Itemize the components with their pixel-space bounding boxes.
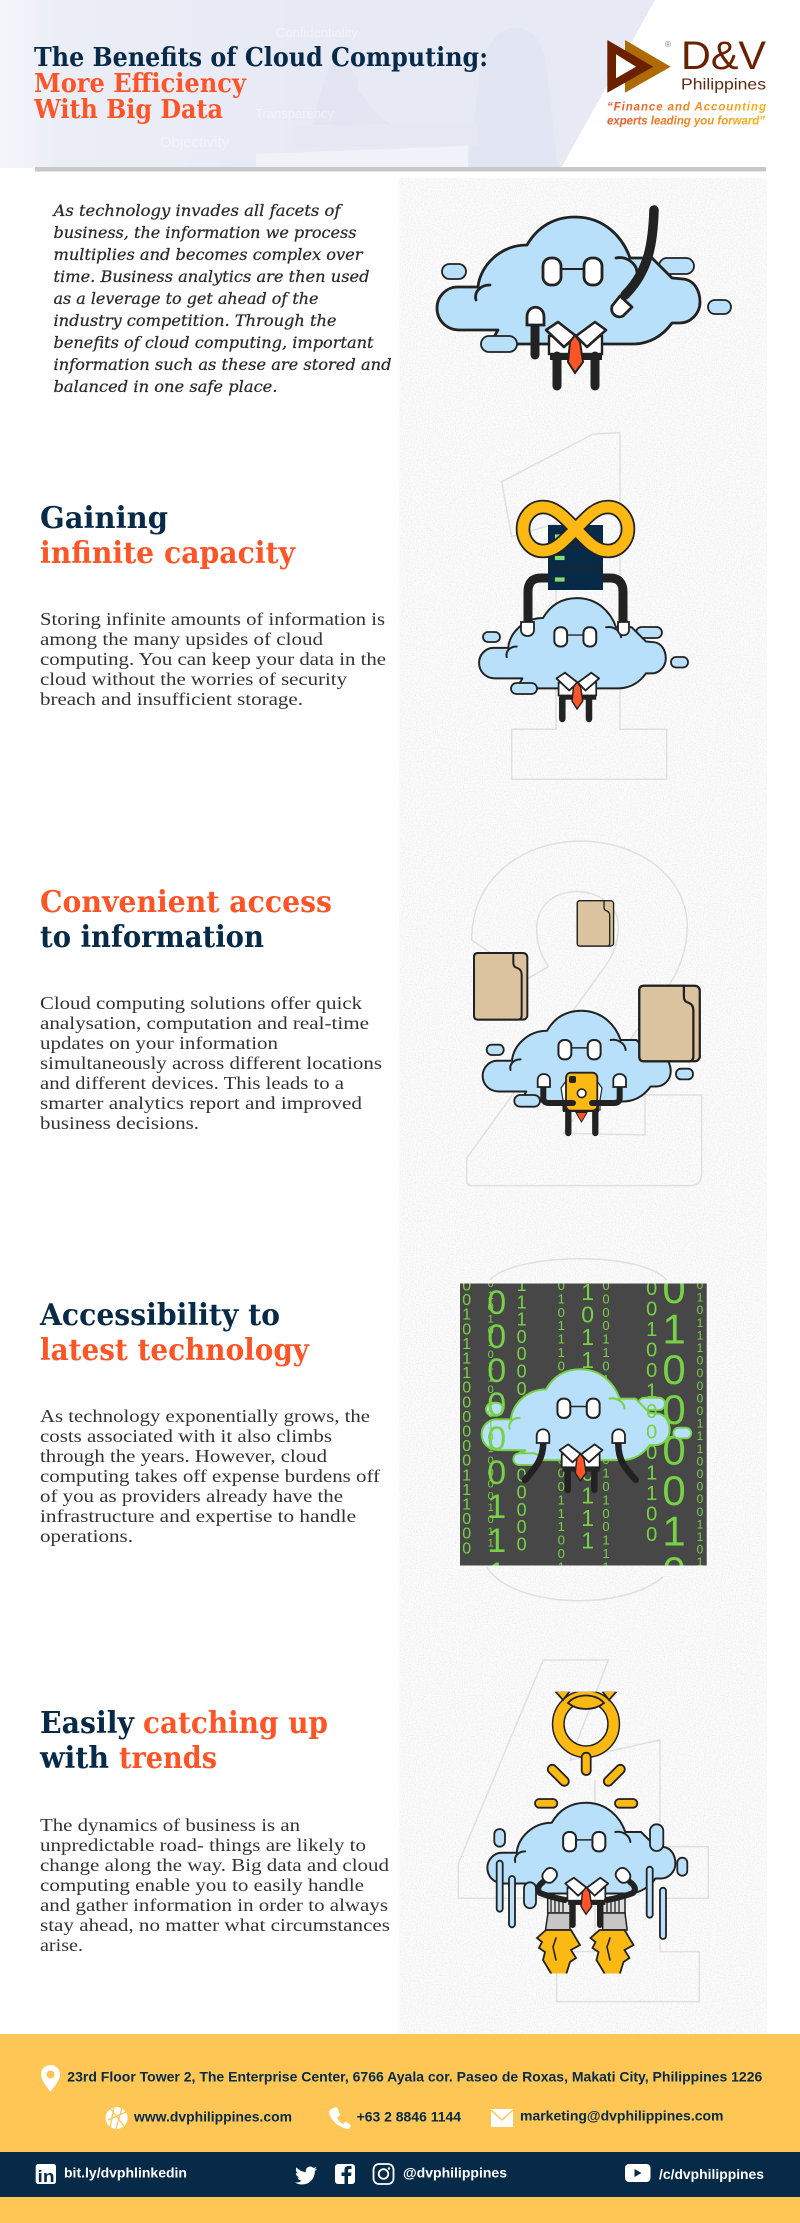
logo: D&V Philippines: “Finance and Accounting (607, 102, 766, 114)
icon: LinkedIn (36, 2164, 56, 2186)
section 4 heading: Easily (40, 1706, 135, 1741)
section 2 body text (40, 993, 382, 1133)
illustration: cloud holding server with infinity sign (479, 507, 688, 719)
intro paragraph: business, the information we process (54, 224, 357, 242)
logo: D&V Philippines: Philippines (681, 76, 766, 94)
illustration: cloud over falling binary code: 0000110101100010100111 (598, 1278, 614, 1573)
section 3 body text: costs associated with it also climbs (40, 1426, 332, 1446)
section 2 body text: smarter analytics report and improved (40, 1093, 362, 1113)
intro paragraph: time. Business analytics are then used (54, 268, 370, 286)
logo: D&V Philippines: ® (665, 40, 671, 49)
title: The Benefits of Cloud Computing: (34, 43, 488, 73)
illustration: cloud with microphone and headset (437, 210, 731, 386)
section 1 body text: cloud without the worries of security (40, 669, 347, 689)
intro paragraph (51, 202, 392, 396)
illustration: cloud over falling binary code: 1110000000000000 (512, 1275, 532, 1552)
speckled illustration panel (399, 178, 767, 2034)
section 2 body text: Cloud computing solutions offer quick (40, 993, 362, 1013)
header banner background: Objectivity (160, 134, 230, 151)
icon: telephone (329, 2107, 351, 2129)
icon: location pin (41, 2065, 60, 2092)
social media bar (0, 2152, 800, 2197)
icon: Facebook (335, 2164, 355, 2184)
illustration: cloud over falling binary code: 01000010 (650, 1265, 698, 1588)
section 4 heading: with (39, 1741, 109, 1776)
section 3 body text: infrastructure and expertise to handle (40, 1506, 356, 1526)
logo: D&V Philippines: D&V (681, 34, 766, 78)
section 1 body text: Storing infinite amounts of information is (40, 609, 385, 629)
icon: globe (106, 2107, 128, 2129)
intro paragraph: industry competition. Through the (54, 312, 336, 330)
header divider bar (35, 167, 766, 172)
big ghost numeral 1 (502, 433, 667, 779)
section 3 heading (39, 1298, 310, 1368)
icon: YouTube (625, 2164, 650, 2182)
icon: LinkedIn: in (38, 2167, 54, 2186)
illustration: cloud over falling binary code: 01010101101010100001011 (485, 1278, 497, 1549)
section 2 body text: updates on your information (40, 1033, 278, 1053)
Instagram handle: @dvphilippines (403, 2165, 507, 2181)
section 2 heading: to information (40, 920, 264, 955)
illustration: cloud over falling binary code: 000000111 (478, 1284, 516, 1590)
logo: D&V Philippines (607, 34, 766, 127)
section 3 heading: latest technology (40, 1333, 310, 1368)
section 3 body text: of you as providers already have the (40, 1486, 343, 1506)
section 4 body text: and gather information in order to always (40, 1895, 388, 1915)
icon: Instagram (374, 2164, 394, 2184)
email: marketing@dvphilippines.com (520, 2108, 724, 2124)
section 4 body text: arise. (40, 1935, 83, 1955)
title (33, 43, 488, 125)
section 4 heading: trends (119, 1741, 217, 1776)
section 2 body text: analysation, computation and real-time (40, 1013, 369, 1033)
intro paragraph: as a leverage to get ahead of the (54, 290, 318, 308)
intro paragraph: balanced in one safe place. (54, 378, 278, 396)
section 4 body text: unpredictable road- things are likely to (40, 1835, 366, 1855)
illustration: cloud over falling binary code: 0101110100110000111001 (554, 1278, 569, 1573)
title: More Efficiency (34, 69, 247, 99)
footer contact band (0, 2034, 800, 2223)
section 4 body text: stay ahead, no matter what circumstances (40, 1915, 390, 1935)
section 2 body text: and different devices. This leads to a (40, 1073, 344, 1093)
phone number: +63 2 8846 1144 (357, 2109, 461, 2125)
header banner background: Confidentiality (276, 25, 358, 40)
section 3 body text (40, 1406, 380, 1546)
section 3 body text: computing takes off expense burdens off (40, 1466, 380, 1486)
section 3 heading: Accessibility to (39, 1298, 280, 1333)
section 4 heading: catching up (143, 1706, 328, 1741)
big ghost numeral 3 (487, 1259, 667, 1601)
illustration: jet-powered cloud under lightbulb ring (487, 1691, 687, 1975)
section 1 body text: computing. You can keep your data in the (40, 649, 386, 669)
illustration: cloud over falling binary code: 0010111000000111000 (458, 1278, 475, 1555)
section 4 heading (39, 1706, 328, 1776)
section 1 body text (40, 609, 386, 709)
section 4 body text (40, 1815, 390, 1955)
section 1 heading: infinite capacity (40, 536, 296, 571)
LinkedIn handle: bit.ly/dvphlinkedin (64, 2165, 187, 2181)
section 1 body text: breach and insufficient storage. (40, 689, 303, 709)
intro paragraph: multiplies and becomes complex over (54, 246, 364, 264)
section 4 body text: The dynamics of business is an (40, 1815, 300, 1835)
section 3 body text: As technology exponentially grows, the (40, 1406, 370, 1426)
intro paragraph: information such as these are stored and (54, 356, 392, 374)
section 1 heading (40, 501, 296, 571)
section 2 heading: Convenient access (40, 885, 332, 920)
icon: Twitter (295, 2167, 317, 2185)
big ghost numeral 2 (467, 841, 702, 1186)
section 3 body text: through the years. However, cloud (40, 1446, 327, 1466)
illustration: cloud over falling binary code: 101111000111 (575, 1279, 601, 1550)
big ghost numeral 4 (458, 1660, 708, 2002)
section 1 heading: Gaining (40, 501, 168, 536)
icon: envelope (491, 2109, 513, 2127)
section 1 body text: among the many upsides of cloud (40, 629, 323, 649)
intro paragraph: benefits of cloud computing, important (54, 334, 374, 352)
logo: D&V Philippines: experts leading you forward” (607, 115, 765, 127)
YouTube handle: /c/dvphilippines (659, 2166, 764, 2182)
illustration: cloud over falling binary code: 0010010001100 (641, 1278, 663, 1544)
section 2 heading (40, 885, 332, 955)
section 3 body text: operations. (40, 1526, 133, 1546)
section 4 body text: computing enable you to easily handle (40, 1875, 364, 1895)
intro paragraph: As technology invades all facets of (51, 202, 344, 220)
illustration: cloud over falling binary code (460, 1284, 707, 1566)
illustration: cloud with phone and floating files (474, 901, 700, 1133)
header banner background: Transparency (255, 106, 334, 121)
address: 23rd Floor Tower 2, The Enterprise Center, 6766 Ayala cor. Paseo de Roxas, Makati City, Philippines 1226 (67, 2069, 763, 2085)
illustration: cloud over falling binary code: 01011100000111000001101 (693, 1278, 707, 1568)
section 2 body text: simultaneously across different locations (40, 1053, 382, 1073)
section 4 body text: change along the way. Big data and cloud (40, 1855, 389, 1875)
header banner background (0, 0, 655, 168)
website: www.dvphilippines.com (133, 2109, 292, 2125)
section 2 body text: business decisions. (40, 1113, 199, 1133)
title: With Big Data (33, 95, 223, 125)
